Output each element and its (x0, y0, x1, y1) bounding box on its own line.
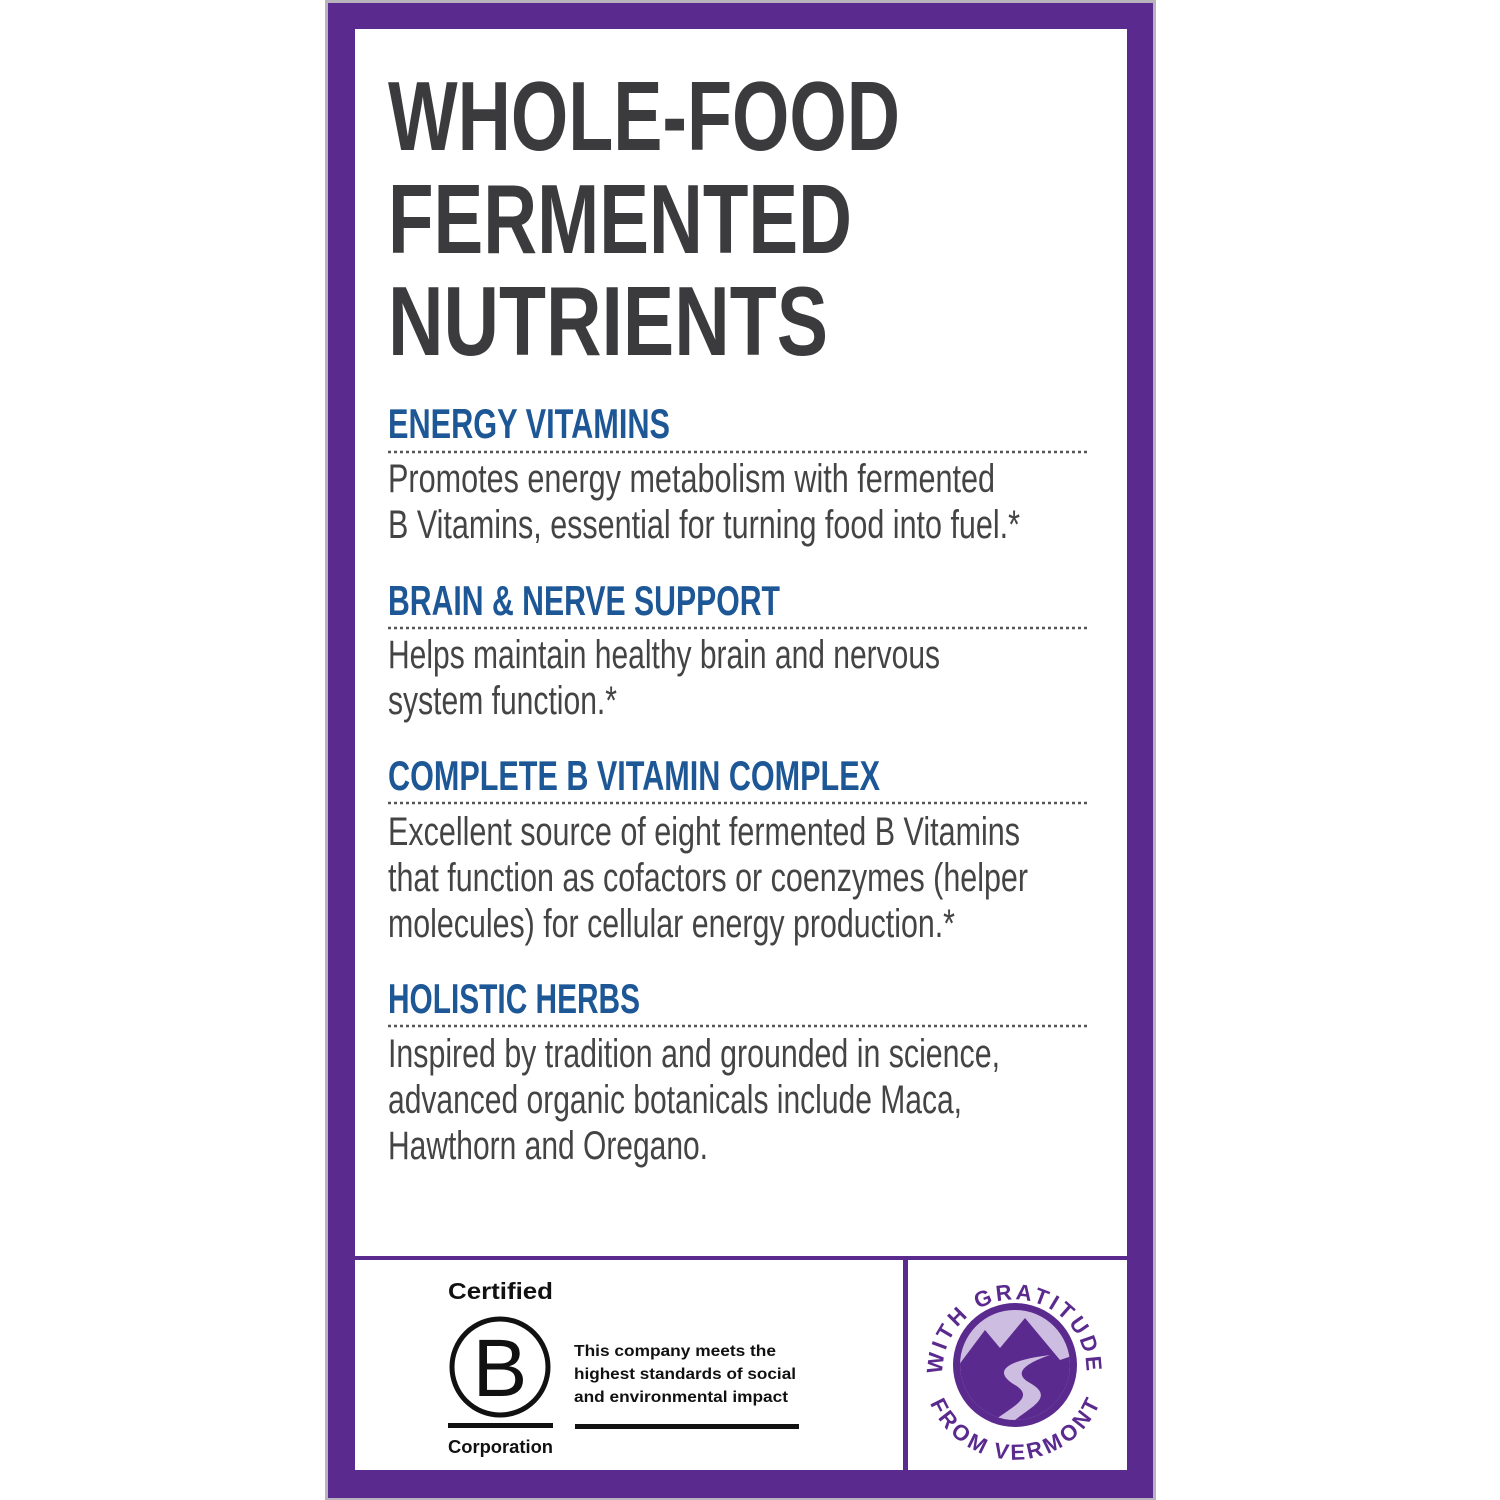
title: FERMENTED (388, 164, 852, 274)
section: brain & nerve support (388, 577, 1090, 723)
section: energy vitamins: ENERGY VITAMINS (388, 400, 670, 447)
section: brain & nerve support: Helps maintain healthy brain and nervous (388, 633, 940, 677)
icon: certified B corporation: highest standards of social (574, 1366, 796, 1383)
icon: certified B corporation: and environmental impact (574, 1389, 789, 1406)
section: complete b vitamin complex (388, 752, 1090, 946)
icon: with gratitude from vermont badge (926, 1284, 1102, 1460)
section: complete b vitamin complex: Excellent source of eight fermented B Vitamins (388, 810, 1020, 854)
icon: certified B corporation: B (473, 1323, 527, 1414)
section: brain & nerve support: BRAIN & NERVE SUPPORT (388, 577, 780, 624)
section: complete b vitamin complex: that function as cofactors or coenzymes (helper (388, 856, 1028, 900)
section: brain & nerve support: system function.* (388, 679, 617, 723)
icon: with gratitude from vermont badge: FROM VERMONT (930, 1396, 1098, 1460)
title: NUTRIENTS (388, 266, 828, 376)
icon: certified B corporation (448, 1278, 799, 1457)
section: holistic herbs: Inspired by tradition and grounded in science, (388, 1032, 1000, 1076)
section: energy vitamins (388, 400, 1090, 547)
section: holistic herbs (388, 975, 1090, 1168)
panel frame (325, 0, 1156, 1500)
icon: certified B corporation: This company meets the (574, 1343, 776, 1360)
infographic panel (325, 0, 1156, 1500)
icon: certified B corporation: Certified (448, 1278, 553, 1304)
section: energy vitamins: B Vitamins, essential for turning food into fuel.* (388, 503, 1020, 547)
title (388, 61, 900, 376)
section: holistic herbs: HOLISTIC HERBS (388, 975, 640, 1022)
section: holistic herbs: advanced organic botanicals include Maca, (388, 1078, 962, 1122)
section: complete b vitamin complex: molecules) for cellular energy production.* (388, 902, 955, 946)
section: energy vitamins: Promotes energy metabolism with fermented (388, 457, 995, 501)
title: WHOLE-FOOD (388, 61, 900, 171)
icon: certified B corporation: Corporation (448, 1437, 553, 1457)
section: complete b vitamin complex: COMPLETE B VITAMIN COMPLEX (388, 752, 880, 799)
icon: with gratitude from vermont badge: WITH GRATITUDE (926, 1284, 1102, 1372)
section: holistic herbs: Hawthorn and Oregano. (388, 1124, 708, 1168)
